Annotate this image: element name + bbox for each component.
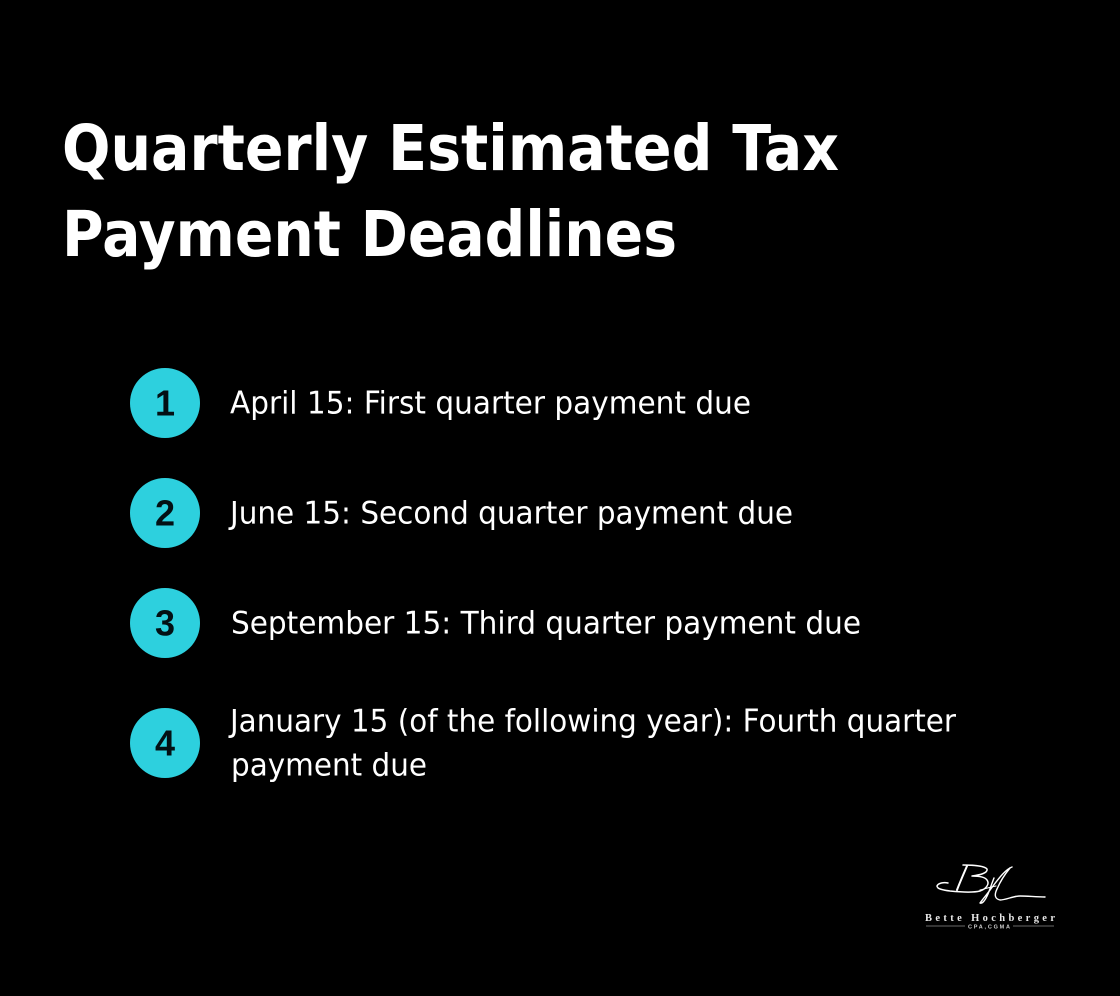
list item 2 bbox=[130, 478, 793, 548]
list item 4: January 15 (of the following year): Fourth quarter bbox=[228, 704, 956, 740]
list item 1: 1 bbox=[155, 382, 175, 424]
title: Payment Deadlines bbox=[62, 198, 677, 271]
icon: BH signature bbox=[937, 865, 1045, 903]
list item 1 bbox=[130, 368, 751, 438]
logo: Bette Hochberger signature bbox=[925, 865, 1055, 930]
list item 4 bbox=[130, 704, 956, 784]
title bbox=[62, 112, 839, 271]
logo credentials: CPA,CGMA bbox=[968, 924, 1010, 930]
list item 2: June 15: Second quarter payment due bbox=[228, 496, 793, 532]
list item 3 bbox=[130, 588, 861, 658]
title: Quarterly Estimated Tax bbox=[62, 112, 839, 185]
logo name: Bette Hochberger bbox=[925, 913, 1055, 924]
list item 4: payment due bbox=[231, 748, 427, 784]
list item 1: April 15: First quarter payment due bbox=[230, 386, 751, 422]
list item 3: 3 bbox=[155, 602, 175, 644]
list item 2: 2 bbox=[155, 492, 175, 534]
list item 3: September 15: Third quarter payment due bbox=[231, 606, 861, 642]
list item 4: 4 bbox=[155, 722, 175, 764]
